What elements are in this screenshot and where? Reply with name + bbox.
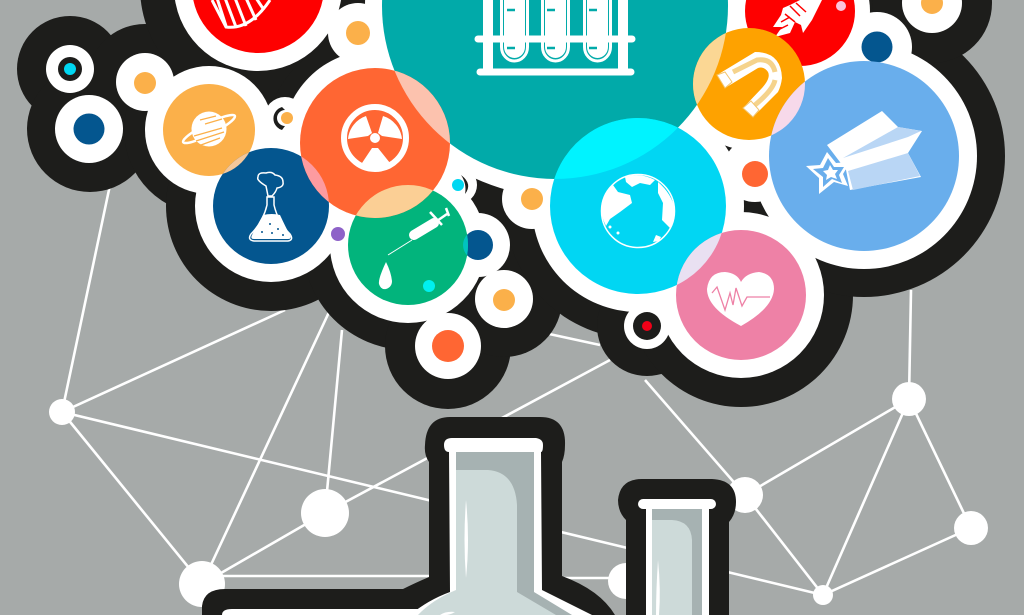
- large flask: [202, 417, 615, 615]
- white bubble halos: [46, 0, 977, 379]
- red bubble: beaker icon: [192, 0, 324, 53]
- amber bubble: magnet icon: [693, 28, 805, 140]
- pink bubble: heart icon: [676, 230, 806, 360]
- black bubble cloud: [17, 0, 1005, 409]
- cyan bubble: globe icon: [550, 118, 726, 294]
- light blue bubble: shooting star icon: [769, 61, 959, 251]
- orange bubble: radiation icon: [300, 68, 450, 218]
- red bubble: rocket icon: [745, 0, 855, 66]
- network lines and nodes: [49, 185, 988, 607]
- small decorative dots: [58, 0, 943, 362]
- green bubble: syringe and drop icon: [348, 190, 468, 305]
- teal bubble: test tube rack icon: [382, 0, 728, 179]
- small test tube: [618, 479, 736, 615]
- yellow bubble: planet icon: [163, 84, 255, 176]
- dark blue bubble: flask with smoke icon: [213, 148, 329, 264]
